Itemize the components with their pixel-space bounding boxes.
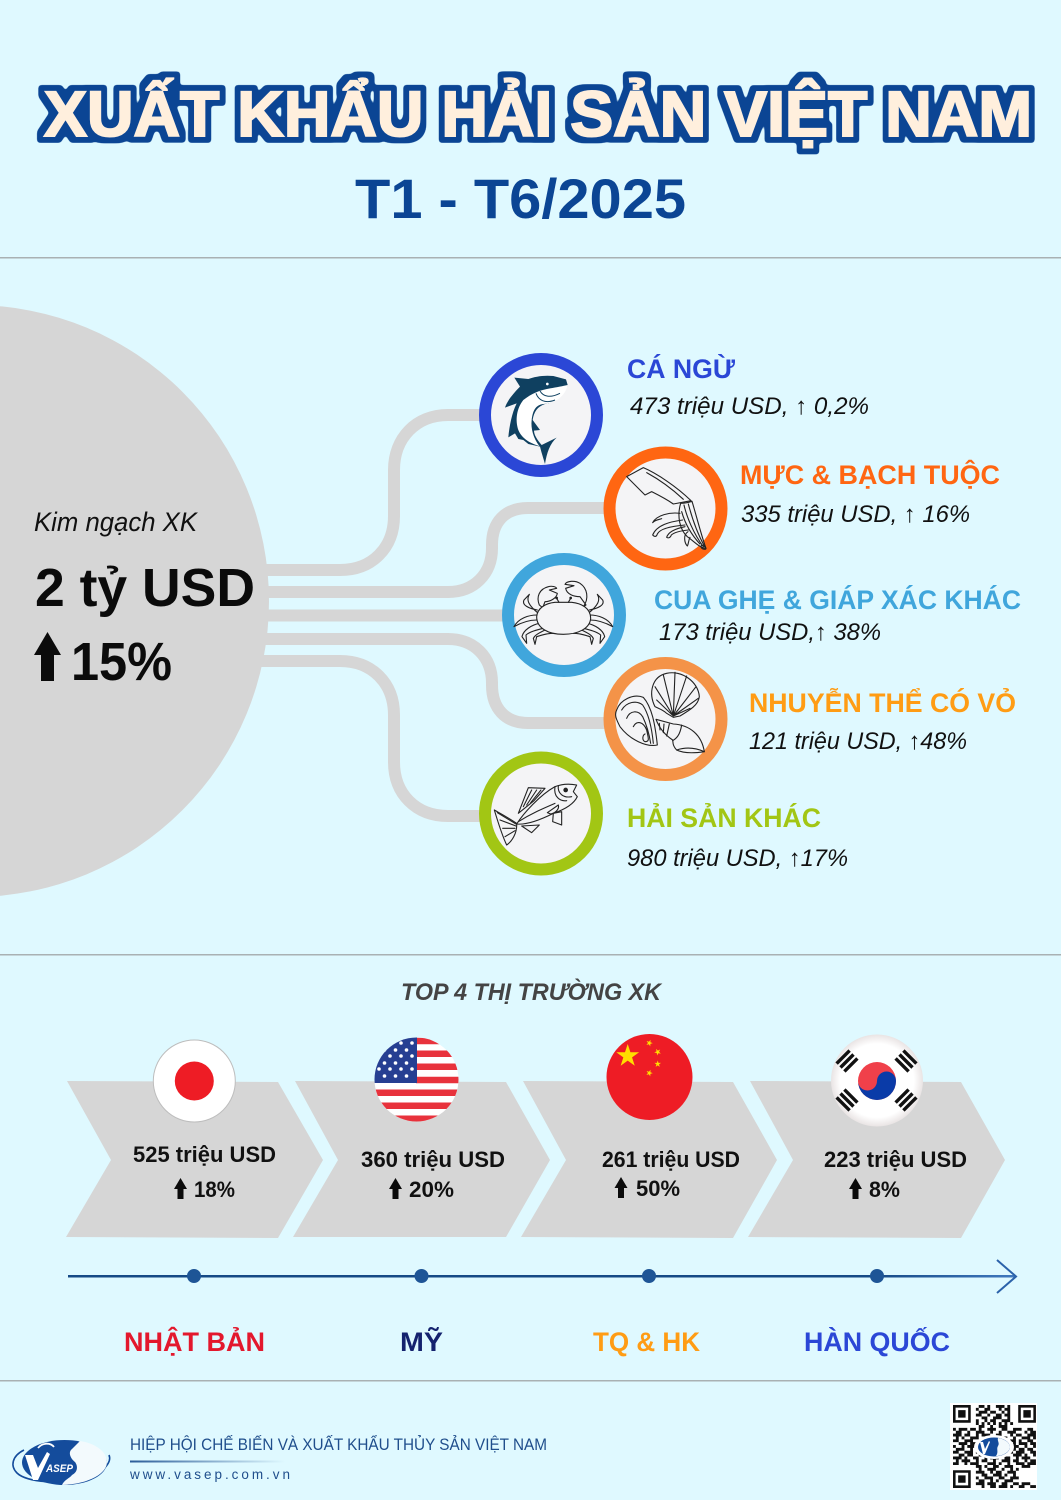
value: 335 triệu USD, ↑ 16%: [741, 501, 970, 528]
growth: 15%: [71, 632, 172, 692]
icon: arrow: [389, 1178, 402, 1199]
subtitle: T1 - T6/2025: [355, 167, 686, 230]
value: 173 triệu USD,↑ 38%: [659, 619, 881, 646]
value: 360 triệu USD: [361, 1147, 505, 1172]
value: 473 triệu USD, ↑ 0,2%: [630, 393, 869, 420]
panel: total export: [0, 305, 615, 897]
icon: arrow: [614, 1177, 628, 1198]
icon: arrow: [849, 1178, 862, 1199]
panel: shellfish: [610, 663, 1016, 775]
icon: up arrow: [34, 632, 61, 681]
panel: USA: [293, 1037, 550, 1237]
chevron: [293, 1081, 550, 1237]
growth: 8%: [869, 1177, 900, 1202]
footer: association name: HIỆP HỘI CHẾ BIẾN VÀ XUẤT KHẨU THỦY SẢN VIỆT NAM: [130, 1435, 547, 1454]
timeline arrow: [68, 1260, 1016, 1293]
panel: South Korea: [748, 1034, 1005, 1238]
connector lines: [260, 415, 615, 816]
label: export value: Kim ngạch XK: [34, 507, 198, 537]
label: USA: MỸ: [400, 1326, 443, 1357]
heading: HẢI SẢN KHÁC: [627, 801, 821, 833]
panel: tuna: [485, 353, 869, 471]
icon: Japan flag: [153, 1040, 235, 1122]
footer: website: www.vasep.com.vn: [129, 1467, 290, 1482]
panel: China and Hong Kong: [521, 1034, 777, 1238]
icon: arrow: [174, 1178, 187, 1199]
total value: 2 tỷ USD: [35, 558, 255, 618]
logo: VASEP: ASEP: [45, 1463, 74, 1475]
icon: crab: [508, 559, 620, 671]
chevron: [521, 1081, 777, 1238]
heading: CUA GHẸ & GIÁP XÁC KHÁC: [654, 584, 1021, 615]
chevron: [748, 1081, 1005, 1238]
value: 261 triệu USD: [602, 1147, 740, 1172]
value: 980 triệu USD, ↑17%: [627, 845, 848, 872]
value: 121 triệu USD, ↑48%: [749, 728, 967, 755]
growth: 50%: [636, 1176, 680, 1201]
panel: Japan: [66, 1040, 323, 1238]
chevron: [66, 1081, 323, 1238]
panel: other seafood: [485, 758, 848, 872]
growth: 20%: [409, 1177, 454, 1202]
label: South Korea: HÀN QUỐC: [804, 1325, 950, 1357]
heading: NHUYỄN THỂ CÓ VỎ: [749, 686, 1016, 718]
icon: tuna: [485, 359, 597, 471]
icon: squid: [610, 452, 722, 564]
label: China and Hong Kong: TQ & HK: [593, 1327, 700, 1357]
value: 525 triệu USD: [133, 1142, 276, 1167]
heading: MỰC & BẠCH TUỘC: [740, 459, 1000, 490]
label: Japan: NHẬT BẢN: [124, 1325, 265, 1357]
title: XUẤT KHẨU HẢI SẢN VIỆT NAM: [44, 77, 1032, 150]
panel: crab: [508, 559, 1021, 671]
value: 223 triệu USD: [824, 1147, 967, 1172]
icon: Korea flag: [831, 1034, 923, 1126]
big circle: [0, 305, 269, 897]
section heading: top 4 markets: TOP 4 THỊ TRƯỜNG XK: [401, 978, 663, 1006]
panel: squid: [610, 452, 1000, 564]
QR code: [950, 1403, 1037, 1490]
logo: VASEP: [13, 1440, 110, 1485]
icon: China flag: [606, 1034, 692, 1120]
icon: fish: [485, 758, 597, 870]
icon: shells: [610, 663, 722, 775]
growth: 18%: [194, 1177, 235, 1202]
icon: US flag: [374, 1037, 460, 1122]
heading: CÁ NGỪ: [627, 353, 736, 384]
